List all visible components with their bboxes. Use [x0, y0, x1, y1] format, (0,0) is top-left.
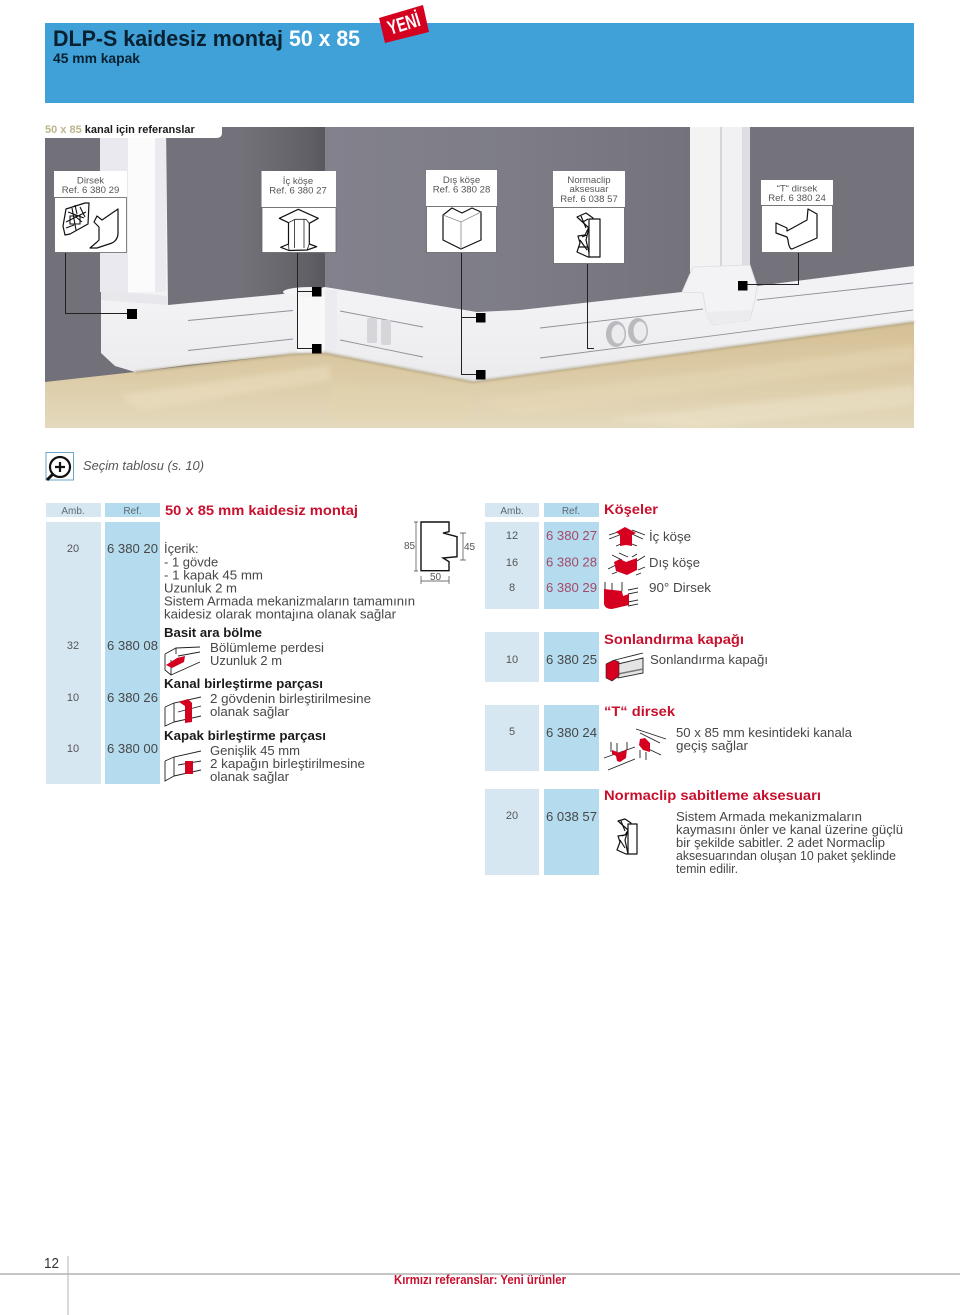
- icon: outer corner red: [608, 553, 645, 575]
- row: 6 380 08: 6 380 08: [107, 638, 158, 653]
- callout: Dış köşe: Ref. 6 380 28: [433, 184, 490, 196]
- floor contact shadow: [135, 322, 914, 382]
- panel: T elbow: 5: [509, 726, 515, 738]
- description: temin edilir.: [676, 861, 738, 876]
- panel: corners: Dış köşe: [649, 555, 700, 570]
- icon: end cap: [606, 653, 643, 681]
- panel: T elbow: geçiş sağlar: [676, 738, 749, 753]
- sockets: [606, 318, 648, 347]
- panel: corners: 8: [509, 582, 515, 594]
- description: Sistem Armada mekanizmaların: [676, 809, 862, 824]
- callout: İç köşe: İç köşe: [283, 176, 313, 187]
- icon: elbow: [63, 203, 118, 248]
- heading: Sonlandırma kapağı: [604, 631, 744, 647]
- row: 6 380 20: 20: [67, 543, 79, 555]
- cross-section drawing: 45: [464, 542, 476, 553]
- title size: 50 x 85: [289, 26, 360, 51]
- panel: corners: [485, 501, 712, 609]
- row: 6 380 00: olanak sağlar: [210, 769, 290, 784]
- row: 6 380 08: Bölümleme perdesi: [210, 640, 324, 655]
- panel: right table header: Ref.: [562, 506, 580, 517]
- callout: Dirsek: Ref. 6 380 29: [62, 185, 119, 196]
- row: 6 380 20: Sistem Armada mekanizmaların tamamının: [164, 594, 415, 608]
- panel: corners: 6 380 29: [546, 580, 597, 595]
- icon: partition: [165, 647, 200, 675]
- row: 6 380 00: Kapak birleştirme parçası: [164, 729, 326, 743]
- row: 6 380 26: 2 gövdenin birleştirilmesine: [210, 691, 371, 706]
- callout: Dirsek: Dirsek: [77, 176, 104, 186]
- header band: [45, 23, 914, 103]
- callout: Dirsek: [54, 171, 127, 252]
- row: 6 380 26: 10: [67, 692, 79, 704]
- cover grooves: [188, 283, 913, 358]
- row: 6 380 00: 6 380 00: [107, 741, 158, 756]
- row: 6 380 08: Basit ara bölme: [164, 626, 262, 640]
- floor: [45, 322, 914, 428]
- description: bir şekilde sabitler. 2 adet Normaclip: [676, 835, 885, 850]
- panel: left table: [46, 502, 476, 784]
- panel: end cap: [485, 631, 768, 682]
- description: [676, 809, 903, 876]
- panel: T elbow: 50 x 85 mm kesintideki kanala: [676, 725, 853, 740]
- icon: duct joint: [165, 697, 201, 726]
- cross-section drawing: 85: [404, 541, 416, 552]
- panel: T elbow: [485, 703, 853, 771]
- row: 6 380 26: 6 380 26: [107, 690, 158, 705]
- row: 6 380 00: Genişlik 45 mm: [210, 743, 300, 758]
- callout: T dirsek: “T“ dirsek: [777, 184, 817, 194]
- panel: corners: 16: [506, 557, 518, 569]
- page number: 12: [44, 1255, 59, 1272]
- row: 6 380 00: [67, 729, 365, 784]
- selection table link: [46, 452, 204, 480]
- row: 6 380 20: İçerik:: [164, 541, 199, 556]
- column headers: Ref.: [123, 506, 142, 517]
- panel: Normaclip: 20: [506, 810, 518, 822]
- panel: corners: 90° Dirsek: [649, 580, 712, 595]
- icon: T piece: [776, 209, 817, 249]
- row: 6 380 00: 2 kapağın birleştirilmesine: [210, 756, 365, 771]
- row: 6 380 20: [67, 541, 415, 622]
- panel: end cap: Sonlandırma kapağı: [650, 652, 768, 667]
- small far sockets: [367, 318, 391, 345]
- description: aksesuarından oluşan 10 paket şeklinde: [676, 848, 896, 863]
- icon: inner corner red: [609, 527, 645, 546]
- panel: Normaclip: 6 038 57: [546, 809, 597, 824]
- description: kaymasını önler ve kanal üzerine güçlü: [676, 822, 903, 837]
- subtitle: 45 mm kapak: [53, 50, 140, 66]
- row: 6 380 20: 6 380 20: [107, 541, 158, 556]
- callout: Normaclip: Normaclip: [567, 175, 611, 186]
- callout: İç köşe: Ref. 6 380 27: [269, 186, 327, 196]
- row: 6 380 26: [67, 677, 371, 726]
- panel: T elbow: 6 380 24: [546, 725, 597, 740]
- panel: corners: 6 380 28: [546, 554, 597, 570]
- callout: Normaclip: aksesuar: [570, 184, 609, 195]
- heading: 50 x 85 mm kaidesiz montaj: [165, 502, 358, 518]
- heading: Köşeler: [604, 501, 659, 517]
- column headers: [46, 503, 160, 517]
- callout: T dirsek: [761, 180, 833, 252]
- cross-section drawing: 50: [430, 572, 442, 583]
- row: 6 380 20: - 1 kapak 45 mm: [164, 568, 263, 582]
- row: 6 380 08: 32: [67, 640, 79, 652]
- trunking: [100, 127, 914, 382]
- panel: corners: 6 380 27: [546, 528, 597, 543]
- row: 6 380 08: [67, 626, 324, 675]
- column headers: Amb.: [61, 506, 85, 517]
- panel: right table header: [485, 503, 599, 517]
- callout: Normaclip: [553, 171, 625, 264]
- row: 6 380 20: - 1 gövde: [164, 554, 218, 570]
- panel: corners: 12: [506, 530, 518, 542]
- icon: elbow red: [604, 582, 638, 609]
- callout: T dirsek: Ref. 6 380 24: [768, 193, 826, 204]
- tab: references heading: 50 x 85 kanal için referanslar: [45, 124, 196, 136]
- footer note: Kırmızı referanslar: Yeni ürünler: [394, 1273, 566, 1287]
- row: 6 380 26: Kanal birleştirme parçası: [164, 677, 323, 691]
- row: 6 380 26: olanak sağlar: [210, 704, 290, 719]
- cross-section drawing: [404, 522, 476, 584]
- callout: Dış köşe: [426, 170, 497, 252]
- corner post: [297, 293, 325, 353]
- row: 6 380 08: Uzunluk 2 m: [210, 653, 282, 668]
- row: 6 380 20: Uzunluk 2 m: [164, 580, 237, 596]
- title: DLP-S kaidesiz montaj: [53, 26, 283, 51]
- row: 6 380 00: 10: [67, 743, 79, 755]
- footer rules: [0, 1256, 960, 1315]
- panel: end cap: 6 380 25: [546, 652, 597, 667]
- icon: outer corner: [443, 208, 481, 249]
- row: 6 380 20: kaidesiz olarak montajına olanak sağlar: [164, 606, 397, 622]
- icon: T elbow pieces: [604, 729, 666, 770]
- icon: cover joint: [165, 751, 201, 781]
- column bodies: [46, 522, 160, 784]
- selection table link: Seçim tablosu (s. 10): [83, 458, 204, 473]
- icon: clip: [577, 213, 600, 257]
- callout: Dış köşe: Dış köşe: [443, 175, 480, 186]
- callout lines and markers: [66, 253, 798, 380]
- room photo: [45, 127, 914, 428]
- icon: clip: [617, 819, 637, 854]
- icon: magnifier: [46, 452, 74, 480]
- callout: Normaclip: Ref. 6 038 57: [560, 194, 618, 205]
- heading: Normaclip sabitleme aksesuarı: [604, 787, 821, 803]
- panel: right table header: Amb.: [500, 506, 524, 517]
- T joint: [682, 265, 757, 325]
- panel: Normaclip: [485, 787, 903, 876]
- icon: inner corner: [279, 209, 318, 250]
- panel: corners: İç köşe: [649, 529, 691, 544]
- heading: “T“ dirsek: [604, 703, 675, 719]
- panel: end cap: 10: [506, 654, 518, 666]
- callout: İç köşe: [262, 171, 336, 252]
- new badge: YENİ: [385, 8, 423, 40]
